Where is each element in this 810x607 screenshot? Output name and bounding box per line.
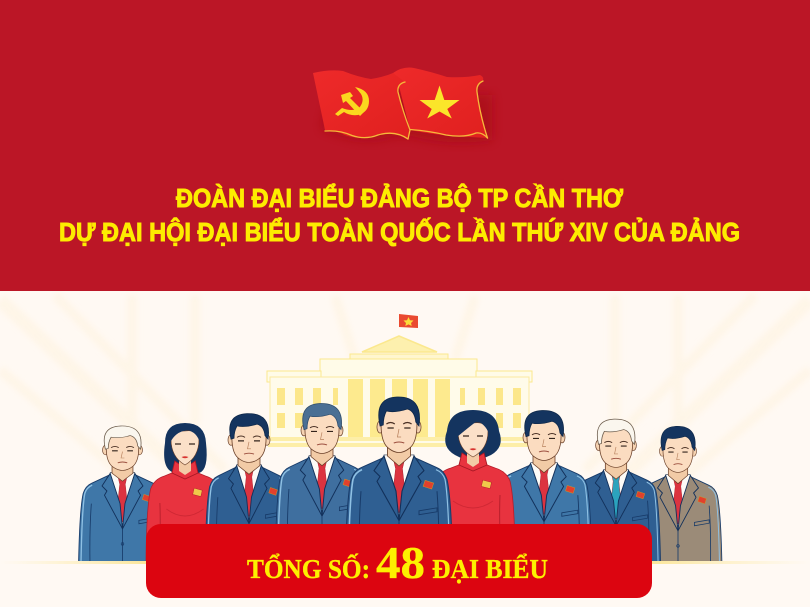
banner number: 48 (376, 538, 425, 588)
wings roof (267, 371, 321, 382)
main wall (270, 377, 529, 441)
party and national flags (313, 68, 492, 142)
header band (0, 0, 810, 291)
banner label: TỔNG SỐ: (247, 553, 370, 584)
delegate 8 (584, 418, 661, 561)
ground line (0, 561, 810, 564)
upper block (320, 359, 477, 377)
delegate 9 (652, 426, 722, 561)
delegate 6 (443, 410, 515, 524)
hair back (445, 410, 501, 461)
national flag (393, 68, 488, 138)
windows (277, 388, 521, 428)
banner unit: ĐẠI BIỂU (432, 553, 548, 584)
cornice (350, 354, 448, 359)
delegates group (78, 396, 722, 561)
delegate 3 (206, 413, 281, 524)
hair back (164, 423, 207, 473)
flag shadow (322, 95, 492, 142)
building illustration (267, 314, 532, 447)
title line 1: ĐOÀN ĐẠI BIỂU ĐẢNG BỘ TP CẦN THƠ (176, 183, 624, 213)
delegate 1 (78, 426, 154, 561)
delegate 2 (146, 423, 213, 561)
title line 2: DỰ ĐẠI HỘI ĐẠI BIỂU TOÀN QUỐC LẦN THỨ XIV CỦA ĐẢNG (59, 216, 740, 247)
total banner (146, 524, 652, 598)
background ray pattern (0, 295, 810, 480)
central columns panels (348, 379, 450, 441)
delegate 5 (346, 396, 452, 524)
title (59, 183, 740, 247)
delegate 4 (276, 403, 358, 524)
base steps (268, 437, 532, 447)
party flag (313, 70, 410, 139)
banner background (146, 524, 652, 598)
pediment (362, 336, 437, 352)
hammer and sickle (335, 87, 369, 116)
flag on roof (399, 314, 418, 328)
star (420, 86, 460, 118)
delegate 7 (507, 410, 591, 524)
